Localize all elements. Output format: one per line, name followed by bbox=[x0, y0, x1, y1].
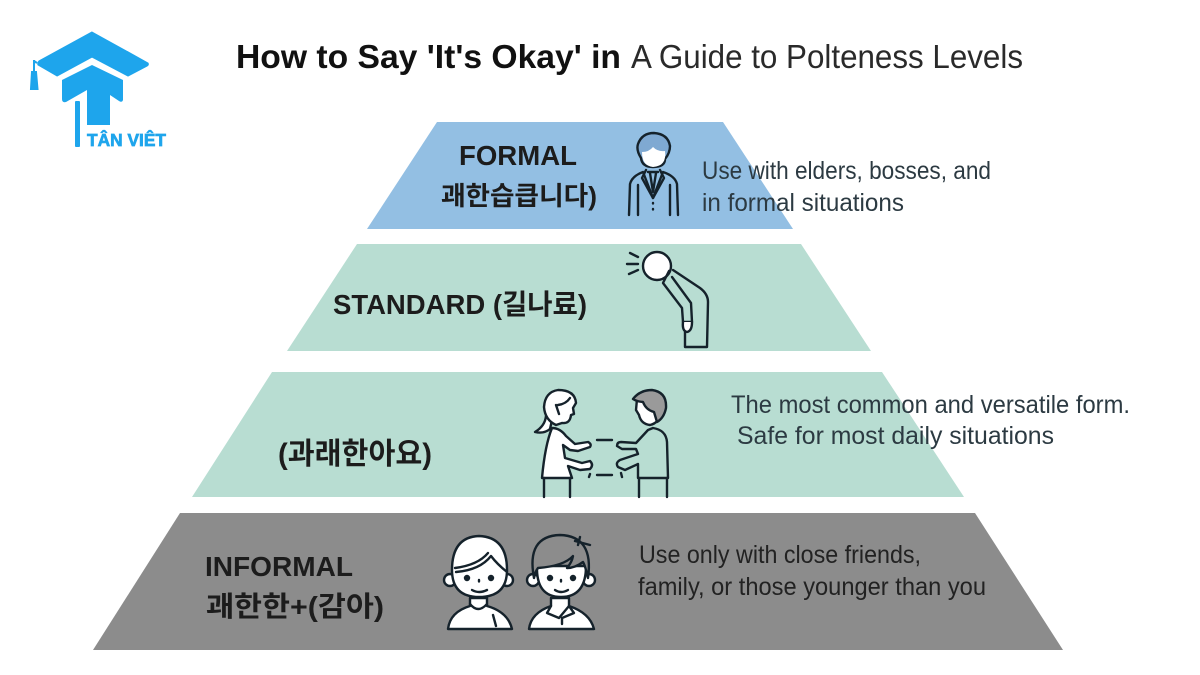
heading: standard: STANDARD (길나료) bbox=[333, 289, 587, 320]
heading: formal: 괘한습큽니다) bbox=[441, 181, 597, 211]
title: How to Say 'It's Okay' in bbox=[236, 38, 621, 75]
description: informal bbox=[638, 541, 986, 601]
icon: two people talking bbox=[535, 390, 668, 497]
heading: formal: FORMAL bbox=[459, 140, 577, 171]
panel: formal tier bbox=[367, 122, 991, 229]
panel: polite tier bbox=[192, 372, 1130, 497]
panel: standard tier bbox=[287, 244, 871, 351]
logo: Tan Viet: TÂN VIÊT bbox=[87, 129, 166, 150]
description: formal: in formal situations bbox=[702, 189, 904, 217]
heading: formal bbox=[441, 140, 597, 211]
panel: informal tier bbox=[93, 513, 1063, 650]
icon: man in suit bbox=[629, 133, 678, 215]
heading: polite: (과래한아요) bbox=[278, 438, 432, 471]
description: polite: Safe for most daily situations bbox=[737, 422, 1054, 450]
description: formal bbox=[702, 157, 991, 217]
icon: friends bbox=[444, 535, 595, 629]
logo: Tan Viet bbox=[31, 32, 166, 150]
description: polite: The most common and versatile form. bbox=[731, 391, 1130, 419]
title: A Guide to Polteness Levels bbox=[631, 38, 1023, 75]
icon: bowing person bbox=[627, 252, 708, 347]
description: informal: Use only with close friends, bbox=[639, 541, 921, 569]
title bbox=[236, 38, 1023, 75]
description: formal: Use with elders, bosses, and bbox=[702, 157, 991, 185]
heading: informal bbox=[205, 551, 384, 622]
description: polite bbox=[731, 391, 1130, 450]
heading: informal: 괘한한+(감아) bbox=[206, 591, 384, 622]
description: informal: family, or those younger than you bbox=[638, 573, 986, 601]
heading: informal: INFORMAL bbox=[205, 551, 353, 582]
